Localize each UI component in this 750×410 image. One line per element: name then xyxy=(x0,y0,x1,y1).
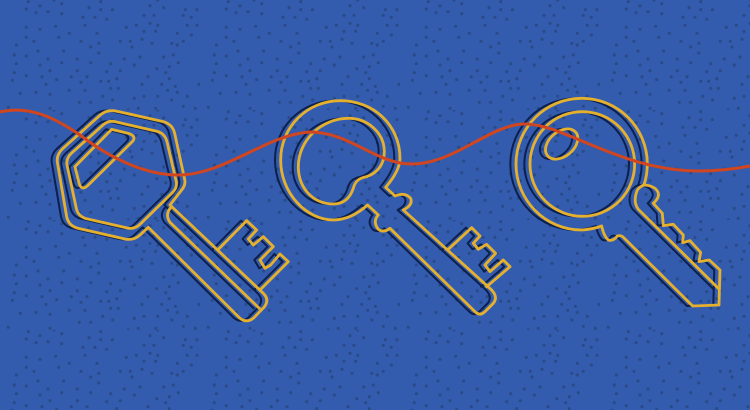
key 2: round bow with keyhole xyxy=(275,101,510,314)
key 3: circular bow with notched blade xyxy=(510,98,720,306)
red wavy thread xyxy=(0,110,750,175)
key 1: hexagonal bow xyxy=(52,111,288,321)
